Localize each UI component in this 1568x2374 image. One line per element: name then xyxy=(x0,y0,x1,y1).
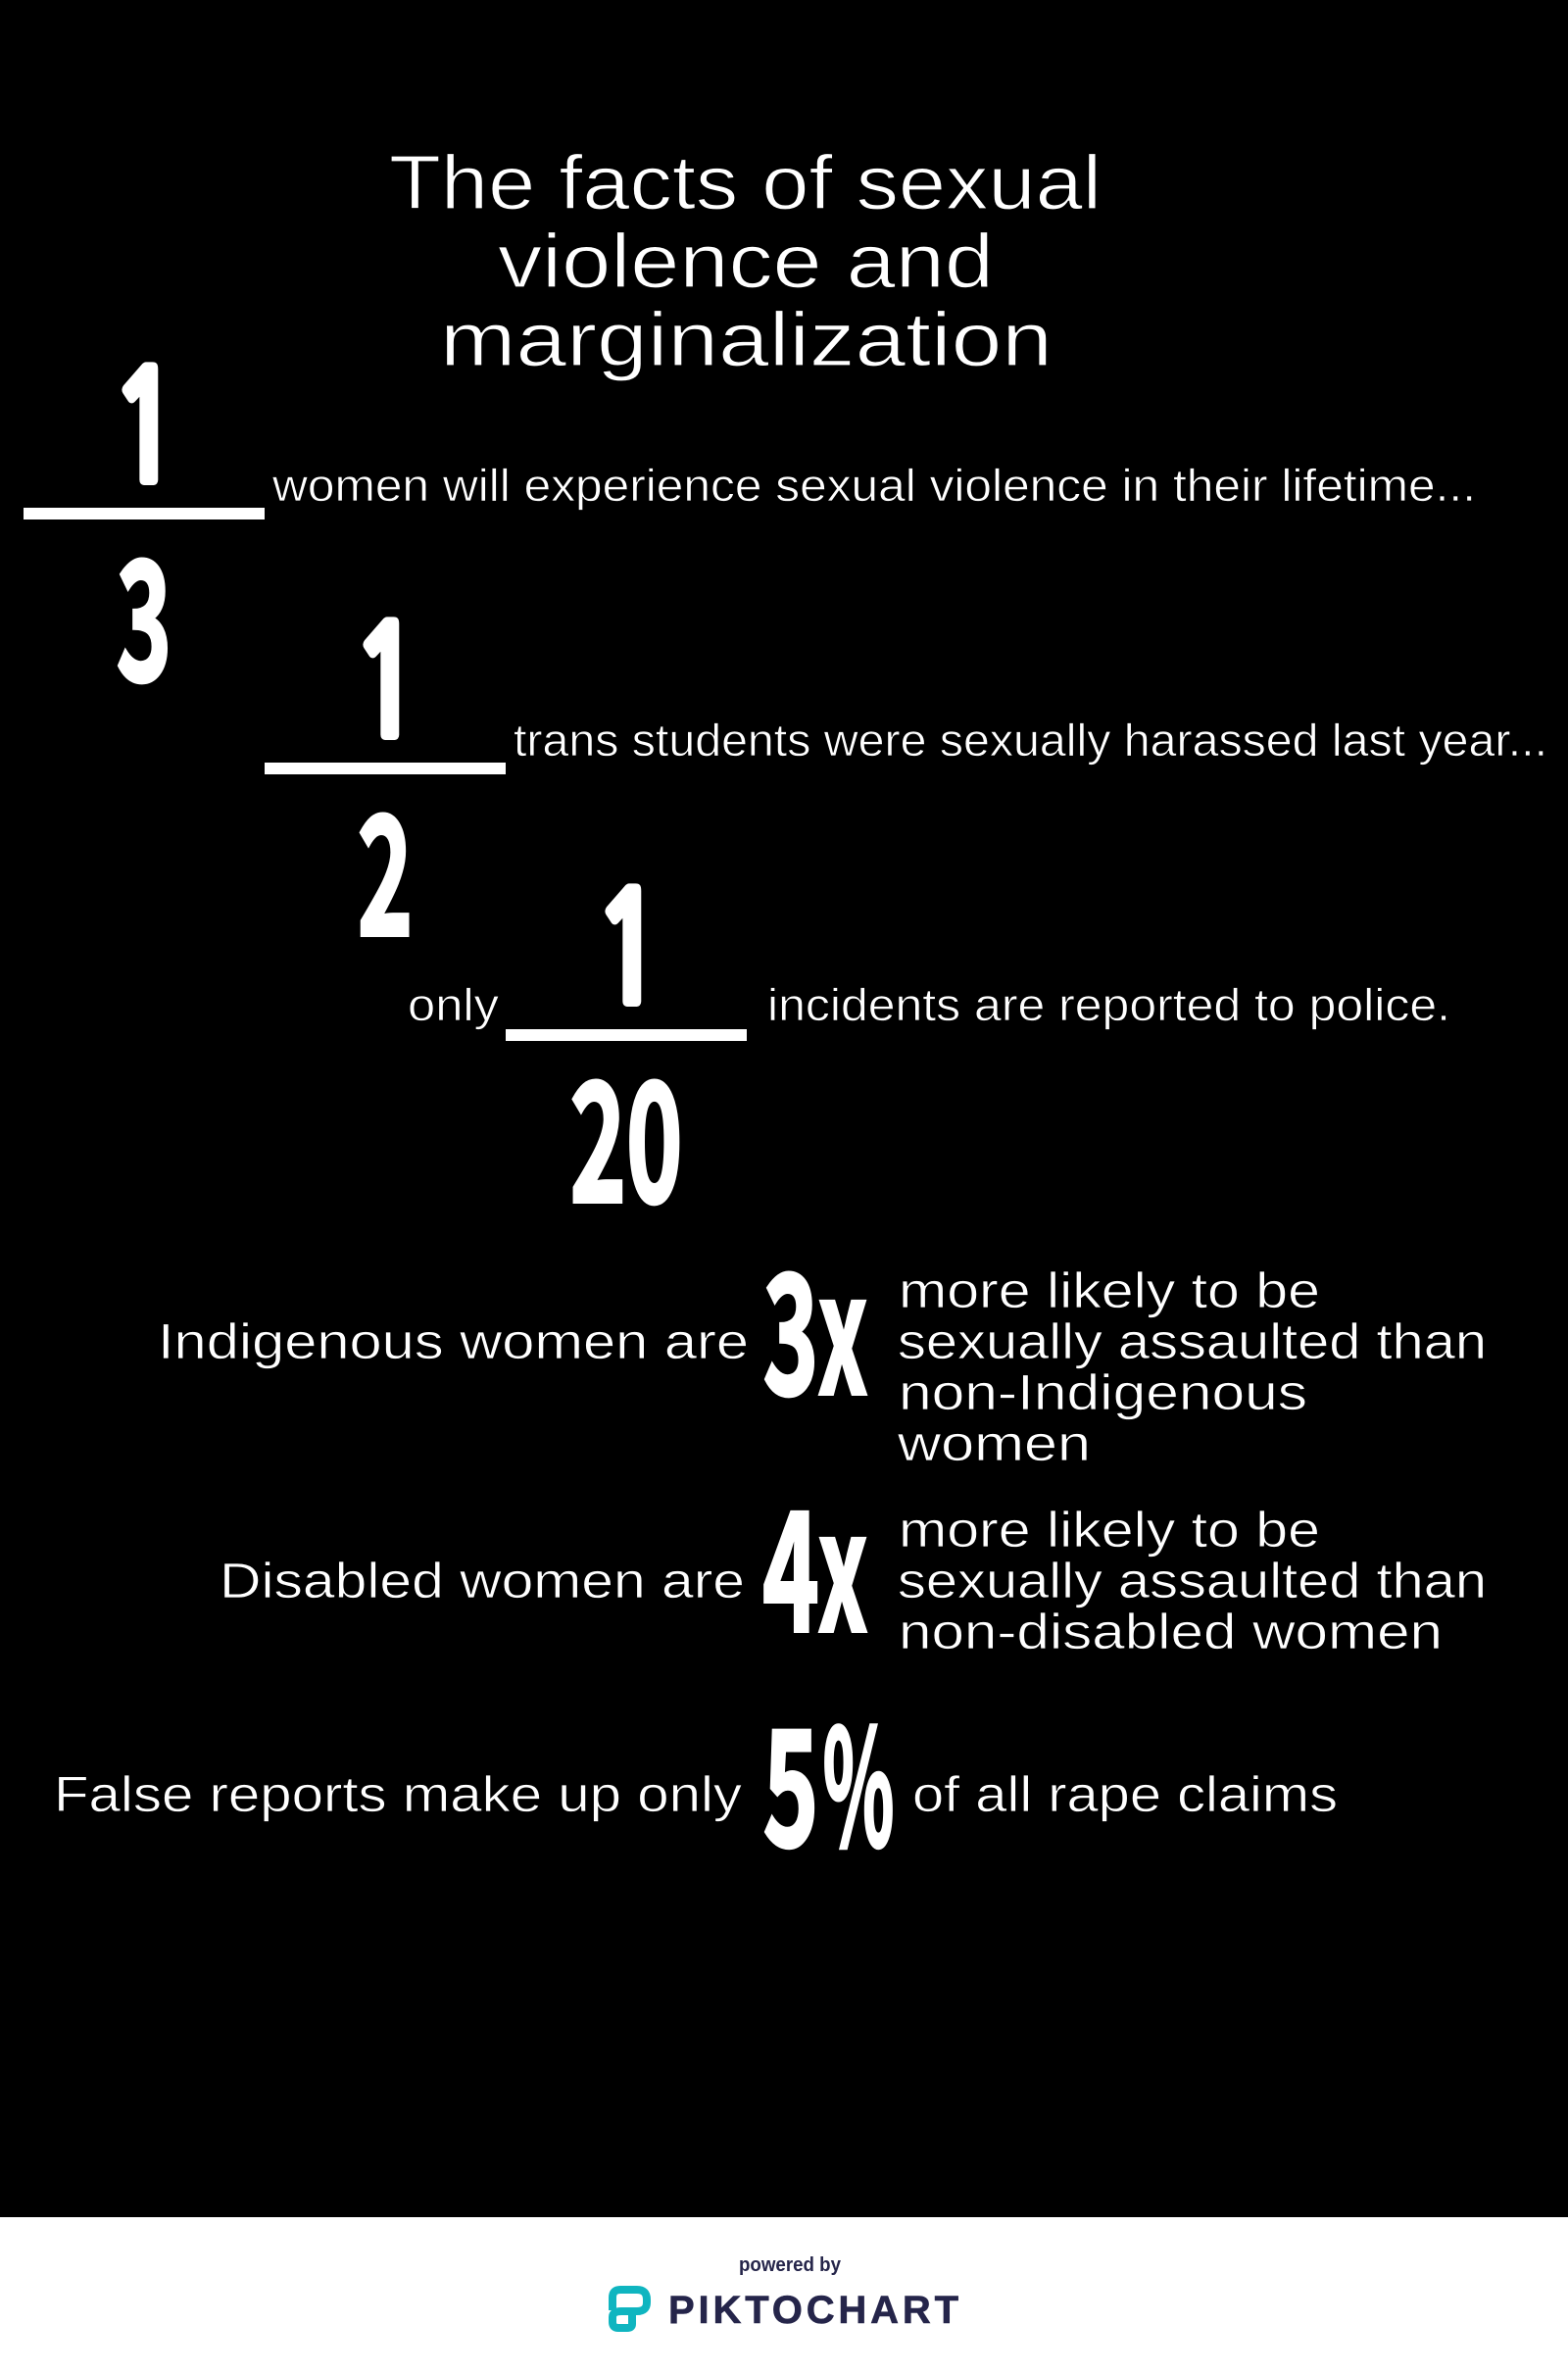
text: more likely than non-Indigenous women: more likely to be xyxy=(899,1262,1320,1318)
number: 5%: % xyxy=(823,1660,894,1892)
number: 3x xyxy=(763,1203,867,1442)
text: incidents: incidents are reported to police. xyxy=(767,979,1450,1030)
text: more likely than non-disabled women xyxy=(898,1502,1487,1659)
icon: Piktochart logo xyxy=(612,2290,647,2328)
text: more likely than non-Indigenous women: sexually assaulted than xyxy=(898,1313,1487,1369)
fraction 1/20: 1 xyxy=(592,875,666,1026)
stat: 1 in 3 women xyxy=(24,354,1476,728)
text: more likely than non-Indigenous women: women xyxy=(897,1415,1091,1471)
fraction 1/20: 20 xyxy=(570,1011,682,1250)
wordmark: Piktochart: PIKTOCHART xyxy=(668,2289,958,2332)
title: marginalization xyxy=(440,296,1053,382)
stat: Indigenous women 3x xyxy=(158,1203,1487,1471)
stat: 1 in 2 trans students xyxy=(265,609,1547,983)
text: of all rape claims: of all rape claims xyxy=(912,1766,1338,1822)
footer band xyxy=(0,2217,1568,2374)
fraction 1/2 xyxy=(265,609,506,983)
fraction 1/3: 1 xyxy=(109,354,183,505)
title: violence and xyxy=(498,218,994,304)
text: more likely than non-Indigenous women xyxy=(897,1262,1487,1471)
number: 4x xyxy=(762,1440,867,1679)
text: women will experience: women will experience sexual violence in their lifetime... xyxy=(271,460,1476,511)
text: more likely than non-disabled women: more likely to be xyxy=(899,1502,1320,1558)
number: 5%: 5 xyxy=(763,1661,818,1893)
fraction 1/20 xyxy=(506,875,747,1250)
title xyxy=(389,139,1102,382)
number: 4x: x xyxy=(818,1440,867,1679)
text: Indigenous women are: Indigenous women are xyxy=(158,1313,749,1369)
powered by: powered by xyxy=(739,2254,842,2276)
fraction 1/3 xyxy=(24,354,265,728)
number: 3x: 3 xyxy=(763,1204,818,1442)
number: 3x: x xyxy=(818,1203,867,1442)
number: 4x: 4 xyxy=(762,1440,819,1679)
fraction 1/3: 3 xyxy=(117,490,172,728)
fraction 1/2: 2 xyxy=(358,745,413,983)
text: more likely than non-disabled women: sexually assaulted than xyxy=(898,1553,1487,1608)
text: more likely than non-disabled women: non-disabled women xyxy=(899,1604,1443,1659)
stat: false reports 5% xyxy=(54,1660,1338,1893)
text: trans students: trans students were sexually harassed last year... xyxy=(514,715,1547,766)
text: only: only xyxy=(408,979,499,1030)
title: The facts of sexual xyxy=(389,139,1102,225)
text: more likely than non-Indigenous women: non-Indigenous xyxy=(899,1364,1307,1420)
text: False reports: False reports make up only xyxy=(54,1766,743,1822)
stat: Disabled women 4x xyxy=(220,1440,1487,1679)
fraction 1/2: 1 xyxy=(350,609,424,760)
stat: 1 in 20 reported xyxy=(408,875,1450,1250)
text: Disabled women are: Disabled women are xyxy=(220,1553,745,1608)
number: 5% xyxy=(763,1660,894,1893)
